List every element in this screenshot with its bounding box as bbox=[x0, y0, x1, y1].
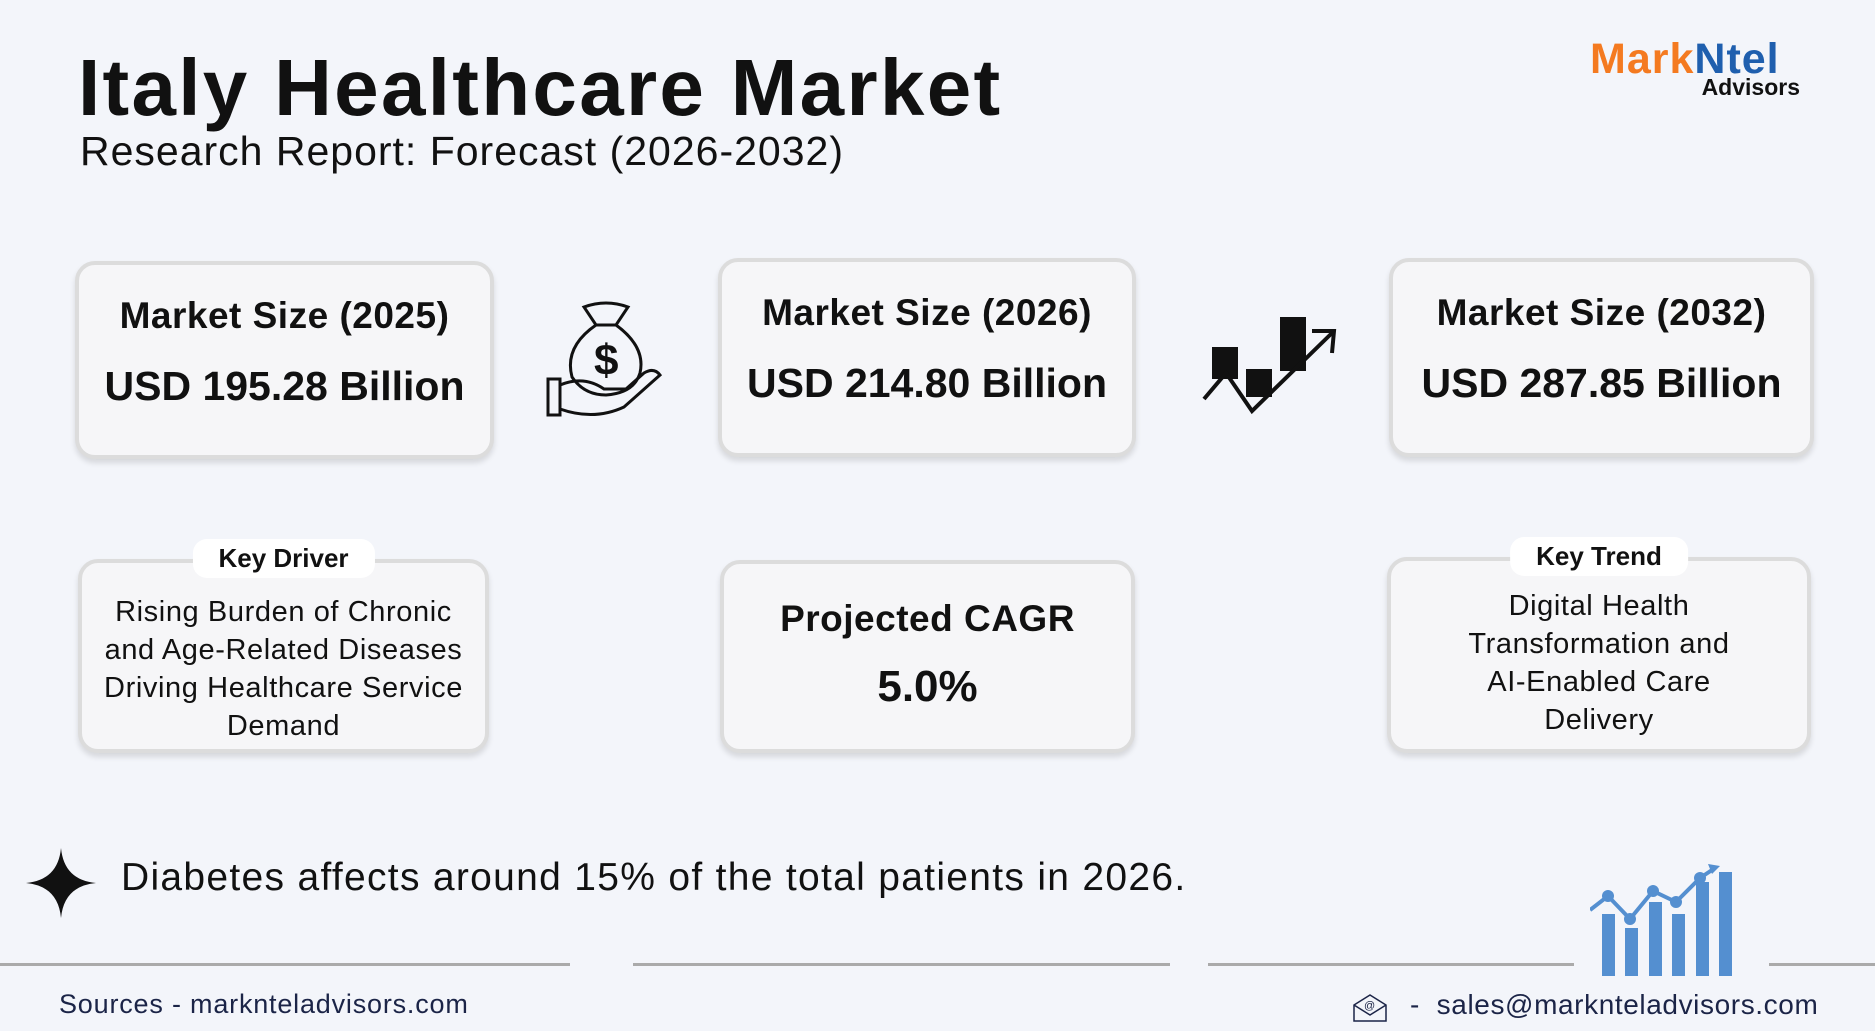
panel: market size 2025 bbox=[75, 261, 494, 459]
icon: bar chart bbox=[1590, 864, 1732, 976]
logo bbox=[1590, 35, 1800, 100]
panel: key driver: Demand bbox=[227, 710, 340, 742]
email: - sales@marknteladvisors.com bbox=[1410, 989, 1818, 1020]
text: Key Trend bbox=[1536, 541, 1662, 571]
panel: market size 2025: Market Size (2025) bbox=[120, 295, 449, 336]
panel: key driver: Rising Burden of Chronic bbox=[115, 596, 452, 628]
panel: key trend: Delivery bbox=[1544, 704, 1654, 736]
panel: market size 2032: Market Size (2032) bbox=[1437, 292, 1766, 333]
panel: CAGR: 5.0% bbox=[877, 662, 978, 711]
panel: market size 2026 bbox=[718, 258, 1136, 457]
logo: Advisors bbox=[1702, 74, 1800, 100]
panel: key driver bbox=[78, 559, 489, 753]
logo: MarkNtel bbox=[1590, 35, 1780, 83]
icon: trend arrow bbox=[1202, 317, 1336, 414]
statement: Diabetes affects around 15% of the total patients in 2026. bbox=[121, 856, 1187, 899]
panel: key trend bbox=[1387, 557, 1811, 753]
panel: market size 2025: USD 195.28 Billion bbox=[104, 363, 464, 409]
icon: email bbox=[1353, 994, 1387, 1022]
panel: key trend: Digital Health bbox=[1509, 590, 1689, 622]
subtitle: Research Report: Forecast (2026-2032) bbox=[80, 128, 844, 174]
title: Italy Healthcare Market bbox=[78, 43, 1002, 132]
text: Key Driver bbox=[218, 543, 349, 573]
panel: market size 2026: Market Size (2026) bbox=[762, 292, 1092, 333]
panel: CAGR bbox=[720, 560, 1135, 753]
icon: star bbox=[26, 848, 96, 918]
panel: key driver: and Age-Related Diseases bbox=[105, 634, 462, 666]
icon: money bag hand: $ bbox=[594, 336, 618, 385]
panel: key driver: Driving Healthcare Service bbox=[104, 672, 463, 704]
panel: key trend: AI-Enabled Care bbox=[1487, 666, 1711, 698]
icon: money bag hand bbox=[546, 302, 662, 416]
panel: market size 2026: USD 214.80 Billion bbox=[747, 360, 1107, 406]
sources: Sources - marknteladvisors.com bbox=[59, 989, 469, 1019]
panel: CAGR: Projected CAGR bbox=[780, 598, 1075, 639]
panel: market size 2032 bbox=[1389, 258, 1814, 457]
icon: email: @ bbox=[1364, 1000, 1375, 1012]
panel: market size 2032: USD 287.85 Billion bbox=[1421, 360, 1782, 406]
panel: key trend: Transformation and bbox=[1468, 628, 1730, 660]
